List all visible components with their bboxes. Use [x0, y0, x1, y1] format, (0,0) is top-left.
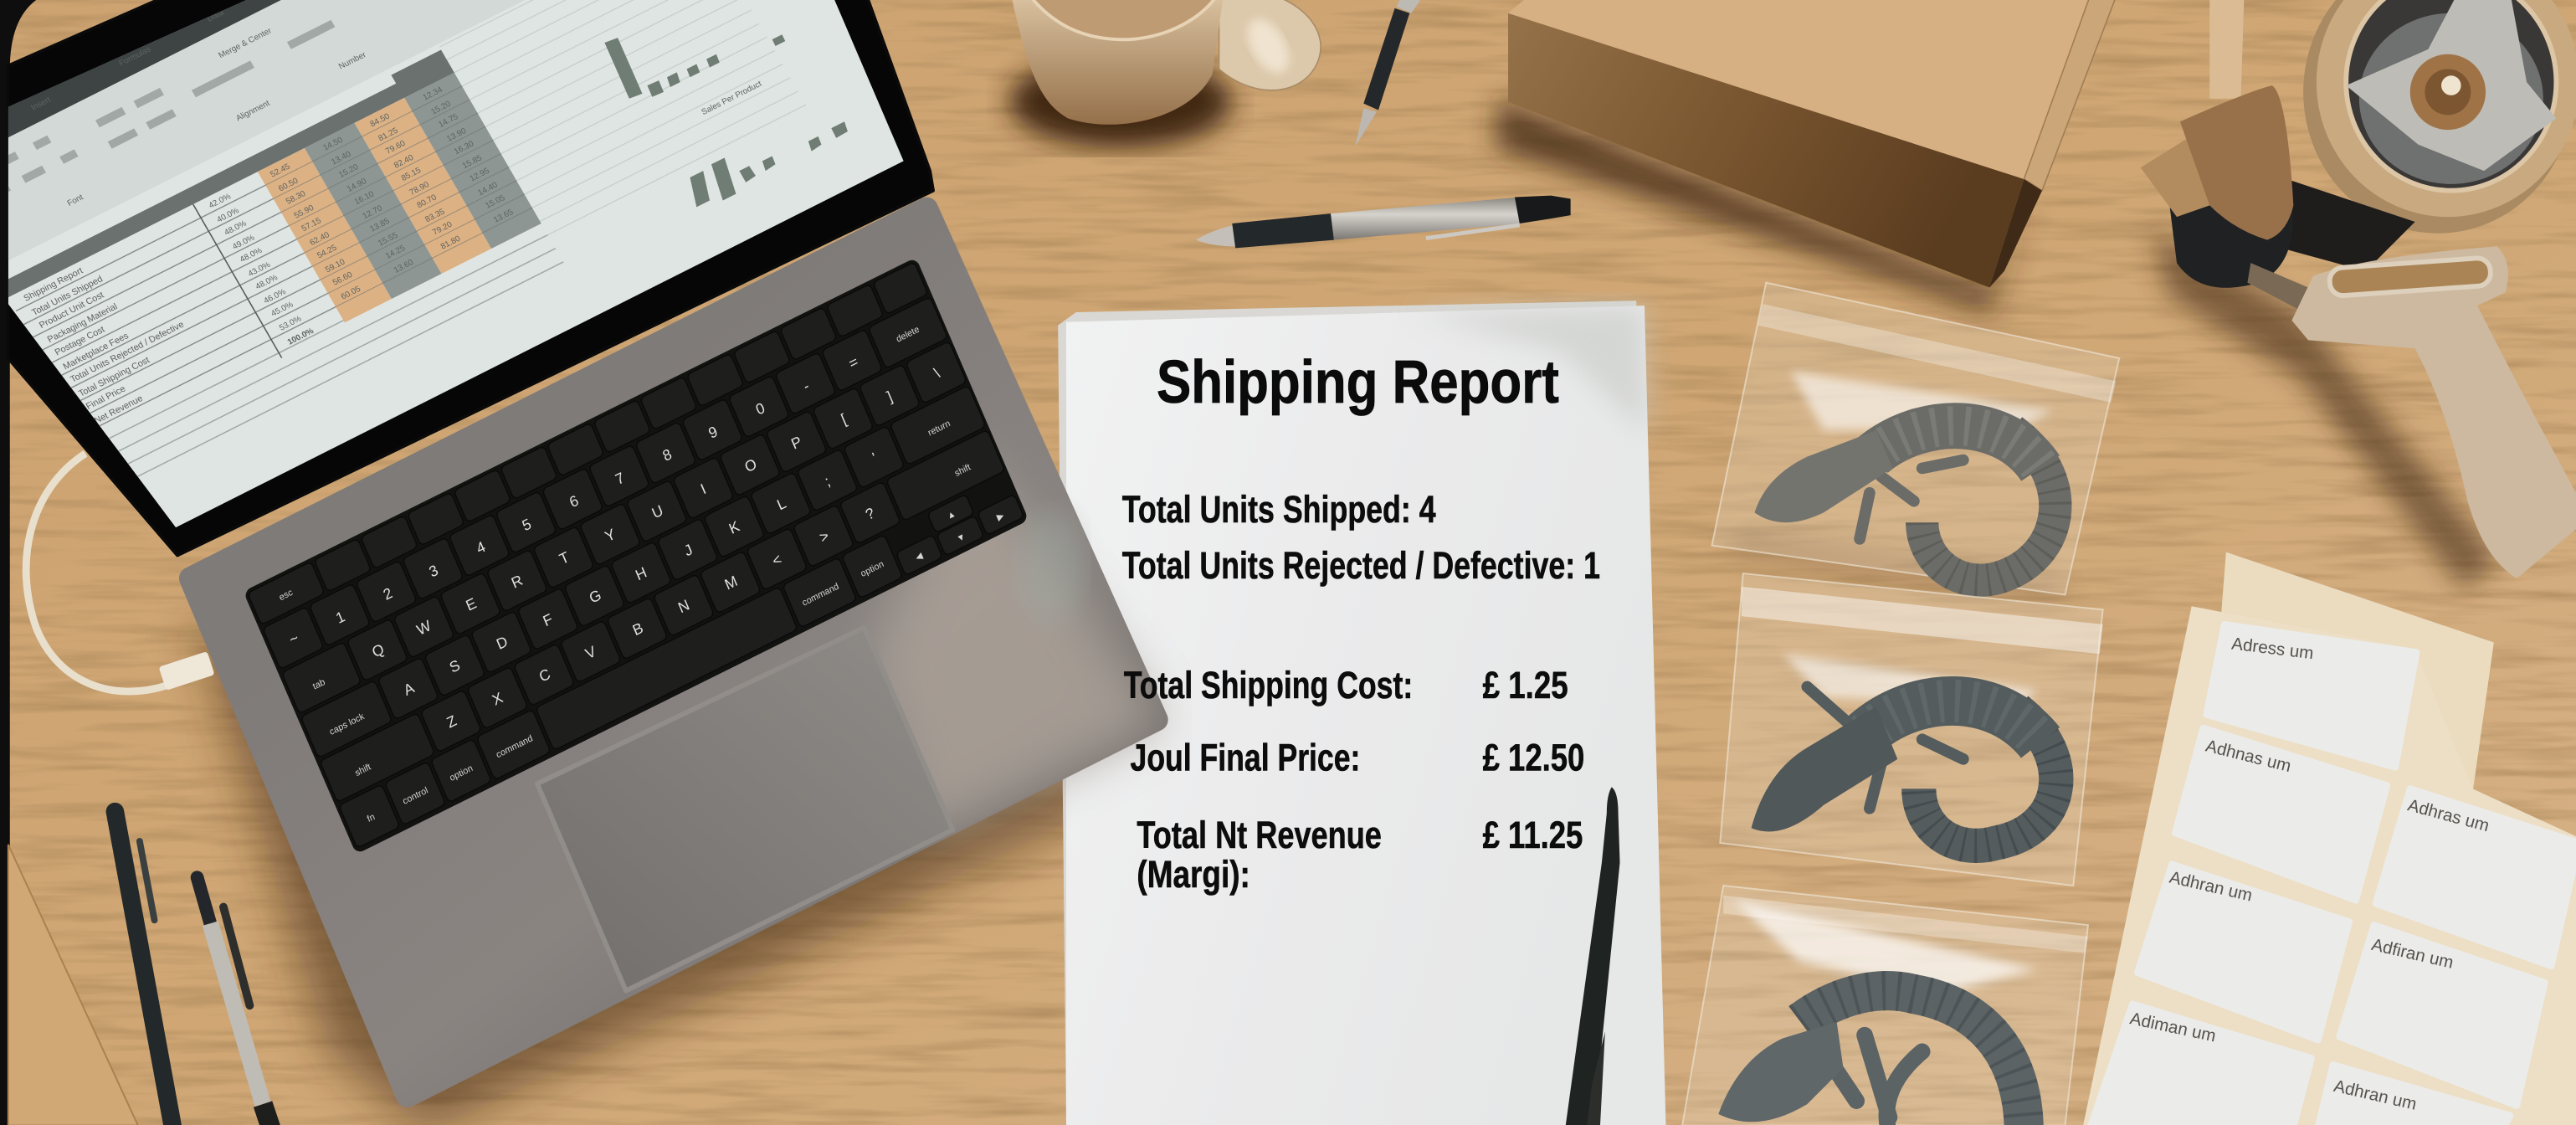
address label sheets [2083, 552, 2576, 1125]
shipping cost label: Total Shipping Cost: [1124, 664, 1413, 706]
spreadsheet values: 100.0% [286, 326, 316, 347]
report lines [1122, 488, 1600, 896]
zip bag 3 with lizard [1682, 886, 2088, 1125]
label: Adhnas: Adhnas um [2204, 737, 2293, 776]
spreadsheet values: 12.95 [468, 167, 491, 183]
spreadsheet values: 56.60 [331, 270, 355, 288]
spreadsheet values: 15.20 [337, 162, 361, 180]
home key row: J [682, 541, 695, 559]
spreadsheet values: 15.20 [429, 100, 453, 116]
cardboard box [1508, 0, 2116, 288]
bottom key row: fn [366, 812, 377, 824]
spreadsheet values: 82.40 [393, 153, 416, 171]
spreadsheet values: 45.0% [269, 300, 295, 319]
bottom key row: option [449, 763, 475, 783]
spreadsheet row labels: Net Revenue [93, 393, 145, 426]
qwerty key row: tab [311, 677, 326, 692]
home key row: D [494, 633, 511, 653]
black frame corner [0, 0, 36, 1125]
spreadsheet values: 14.75 [437, 112, 460, 130]
ribbon labels: Number [337, 50, 368, 71]
spreadsheet values: 43.0% [247, 260, 272, 279]
label: Adress: Adress um [2230, 634, 2315, 663]
ribbon labels: Data [206, 8, 226, 24]
function key row: esc [278, 588, 295, 603]
home key row: K [726, 517, 742, 537]
spreadsheet values: 16.10 [353, 189, 376, 207]
net revenue value: £ 11.25 [1483, 814, 1583, 856]
number key row: 8 [660, 445, 675, 465]
spreadsheet values: 81.25 [377, 126, 400, 143]
ribbon labels: Formulas [117, 45, 153, 69]
units rejected: Total Units Rejected / Defective: 1 [1122, 544, 1600, 587]
spreadsheet values: 59.10 [324, 257, 347, 275]
lizard figure [1752, 686, 2056, 845]
shift key row: C [536, 665, 553, 686]
spreadsheet grid [8, 0, 818, 477]
number key row: - [801, 378, 812, 395]
ribbon labels [30, 12, 365, 206]
spreadsheet values: 48.0% [223, 219, 249, 238]
spreadsheet values: 49.0% [231, 234, 257, 252]
lizard figure [1754, 426, 2055, 580]
label: Adhras [2376, 789, 2576, 966]
qwerty key row: T [557, 548, 572, 568]
qwerty key row: [ [839, 410, 849, 428]
number key row: 7 [613, 469, 627, 488]
spreadsheet values: 54.25 [316, 243, 339, 260]
spreadsheet values: 12.34 [422, 85, 444, 102]
spreadsheet row labels: Marketplace Fees [61, 331, 131, 372]
pen: horizontal [1196, 196, 1571, 248]
qwerty key row: O [742, 455, 759, 475]
spreadsheet row labels: Total Units Rejected / Defective [69, 320, 186, 385]
pen: lower left black [115, 812, 172, 1125]
spreadsheet values: 58.30 [285, 189, 308, 207]
final price label: Joul Final Price: [1131, 737, 1360, 779]
shift key row: Z [444, 711, 459, 732]
qwerty key row: ] [885, 388, 895, 405]
number key row: 5 [520, 515, 534, 534]
home key row: ; [822, 472, 833, 490]
spreadsheet values: 80.70 [415, 193, 439, 210]
spreadsheet values: 55.90 [293, 203, 316, 221]
final price value: £ 12.50 [1483, 737, 1584, 779]
shift key row: shift [354, 762, 372, 778]
bottom key row: command [495, 733, 534, 760]
spreadsheet values: 48.0% [254, 273, 280, 291]
number key row: delete [895, 325, 921, 345]
spreadsheet values: 14.40 [476, 181, 500, 198]
spreadsheet values [208, 85, 524, 347]
bottom key row: option [860, 559, 885, 579]
spreadsheet values: 14.25 [384, 244, 408, 261]
sheet tab: Sheet1 [246, 485, 275, 505]
shift key row: ? [863, 504, 877, 523]
spreadsheet values: 57.15 [300, 216, 323, 234]
coffee mug [1010, 0, 1321, 125]
bottom key row: ▶ [995, 511, 1006, 523]
home key row: A [401, 679, 417, 699]
shift key row [320, 429, 1005, 803]
spreadsheet row labels: Packaging Material [46, 301, 120, 345]
qwerty key row: I [698, 480, 709, 497]
zip bag 1 with lizard [1711, 283, 2119, 595]
margin label: (Margi): [1137, 853, 1250, 896]
home key row: F [541, 610, 556, 629]
function key row [248, 262, 928, 625]
shift key row: N [675, 596, 692, 616]
spreadsheet values: 85.15 [400, 166, 423, 183]
label: Adress [2206, 624, 2417, 768]
home key row [300, 385, 986, 758]
home key row: G [587, 586, 603, 607]
units shipped: Total Units Shipped: 4 [1122, 488, 1436, 531]
home key row: S [447, 656, 463, 676]
home key row: ' [870, 449, 880, 466]
spreadsheet values: 13.90 [445, 126, 469, 144]
label: Adhnas [2175, 728, 2387, 901]
net revenue label: Total Nt Revenue [1137, 814, 1382, 856]
spreadsheet row labels: Postage Cost [54, 325, 106, 357]
spreadsheet values: 42.0% [208, 192, 233, 210]
shift key row: shift [953, 462, 972, 479]
spreadsheet values: 13.85 [368, 217, 392, 234]
bottom key row: ▲ [946, 508, 957, 521]
number key row: 2 [381, 584, 395, 604]
shift key row: M [722, 573, 740, 593]
number key row: 3 [427, 562, 440, 581]
label: Adhran right: Adhran um [2332, 1076, 2419, 1114]
spreadsheet row labels [23, 268, 184, 424]
shift key row: < [770, 550, 784, 570]
shift key row: > [817, 527, 831, 546]
spreadsheet values: 46.0% [262, 287, 288, 306]
report title: Shipping Report [1157, 348, 1559, 416]
spreadsheet values: 15.55 [377, 231, 400, 248]
spreadsheet values: 48.0% [239, 246, 264, 265]
shift key row: B [630, 619, 645, 639]
laptop lid [8, 0, 933, 555]
number key row: ~ [287, 629, 301, 648]
paper strip near dispenser [2209, 0, 2244, 99]
spreadsheet row labels: Total Units Shipped [30, 275, 105, 318]
ribbon labels: Insert [29, 95, 53, 113]
wood strip bottom left [8, 845, 138, 1125]
spreadsheet values: 13.60 [393, 258, 416, 275]
bottom key row: ▼ [955, 532, 967, 545]
lizard figure [1718, 991, 2024, 1125]
label: Adhran right [2317, 1065, 2510, 1125]
qwerty key row: U [649, 501, 665, 521]
spreadsheet values: 13.65 [492, 208, 516, 225]
tape dispenser [2141, 0, 2576, 578]
spreadsheet values: 79.60 [384, 139, 408, 157]
laptop keyboard [244, 257, 1029, 855]
spreadsheet values: 81.80 [439, 234, 463, 251]
number key row [263, 296, 948, 670]
bottom key row: ◀ [914, 551, 925, 563]
bottom key row: control [401, 785, 429, 807]
pen on paper [1566, 787, 1620, 1125]
laptop base [191, 208, 1163, 1096]
number key row: = [846, 353, 860, 372]
ribbon labels: Alignment [234, 99, 272, 123]
qwerty key row: W [414, 617, 434, 639]
home key row: return [926, 419, 952, 439]
qwerty key row: Y [603, 526, 618, 545]
shipping report paper stack [1058, 301, 1665, 1125]
spreadsheet values: 53.0% [278, 314, 304, 333]
number key row: 9 [706, 423, 720, 442]
spreadsheet values: 52.45 [269, 162, 292, 179]
number key row: 6 [567, 491, 581, 511]
shipping cost value: £ 1.25 [1483, 664, 1568, 706]
number key row: 4 [474, 538, 488, 557]
zip bag 2 with lizard [1720, 573, 2103, 886]
home key row: L [774, 495, 788, 513]
spreadsheet values: 12.70 [361, 203, 384, 221]
ribbon labels: Merge & Center [217, 26, 274, 60]
pen: top slim [1355, 0, 1423, 146]
spreadsheet values: 16.30 [453, 139, 476, 157]
label: Adfiran [2339, 925, 2545, 1106]
laptop screen with spreadsheet: Sales Per Product [700, 80, 763, 117]
laptop trackpad [537, 628, 953, 991]
qwerty key row: E [464, 594, 479, 614]
label: Adiman: Adiman um [2128, 1009, 2218, 1045]
spreadsheet values: 15.05 [484, 193, 507, 211]
spreadsheet row labels: Product Unit Cost [38, 290, 105, 331]
pen: lower left silver [198, 877, 273, 1125]
spreadsheet row labels: Final Price [85, 384, 127, 412]
number key row: 1 [333, 608, 347, 627]
spreadsheet values: 62.40 [308, 230, 331, 248]
shift key row: X [490, 689, 505, 709]
spreadsheet values: 79.20 [431, 220, 454, 237]
shift key row: V [582, 643, 598, 662]
spreadsheet values: 40.0% [215, 206, 241, 224]
spreadsheet values: 15.85 [461, 153, 485, 171]
label: Adhras: Adhras um [2406, 795, 2491, 835]
charging cable [26, 454, 215, 691]
home key row: H [633, 563, 649, 583]
label: Adhran left [2137, 864, 2349, 1040]
spreadsheet values: 60.50 [277, 177, 300, 193]
label: Adfiran: Adfiran um [2369, 935, 2455, 973]
spreadsheet values: 83.35 [423, 207, 447, 224]
qwerty key row: P [788, 433, 804, 453]
label: Adhran left: Adhran um [2168, 868, 2254, 906]
spreadsheet charts [604, 34, 848, 207]
laptop screen with spreadsheet [8, 0, 904, 527]
spreadsheet values: 78.90 [408, 180, 431, 198]
spreadsheet values: 14.50 [321, 136, 345, 153]
spreadsheet values: 84.50 [368, 111, 392, 129]
ribbon labels: Font [66, 193, 85, 208]
number key row: 0 [753, 399, 767, 419]
spreadsheet values: 13.40 [330, 150, 353, 167]
qwerty key row: \ [931, 364, 942, 382]
bottom key row: command [801, 582, 840, 609]
home key row: caps lock [328, 711, 367, 737]
spreadsheet row labels: Shipping Report [22, 266, 85, 304]
qwerty key row [281, 341, 967, 714]
spreadsheet row labels: Total Shipping Cost [77, 355, 151, 399]
qwerty key row: Q [370, 640, 387, 660]
spreadsheet values: 60.05 [340, 285, 363, 302]
qwerty key row: R [509, 572, 526, 592]
label: Adiman [2088, 1004, 2312, 1125]
bottom key row [339, 475, 1024, 848]
spreadsheet values: 14.90 [346, 177, 369, 194]
